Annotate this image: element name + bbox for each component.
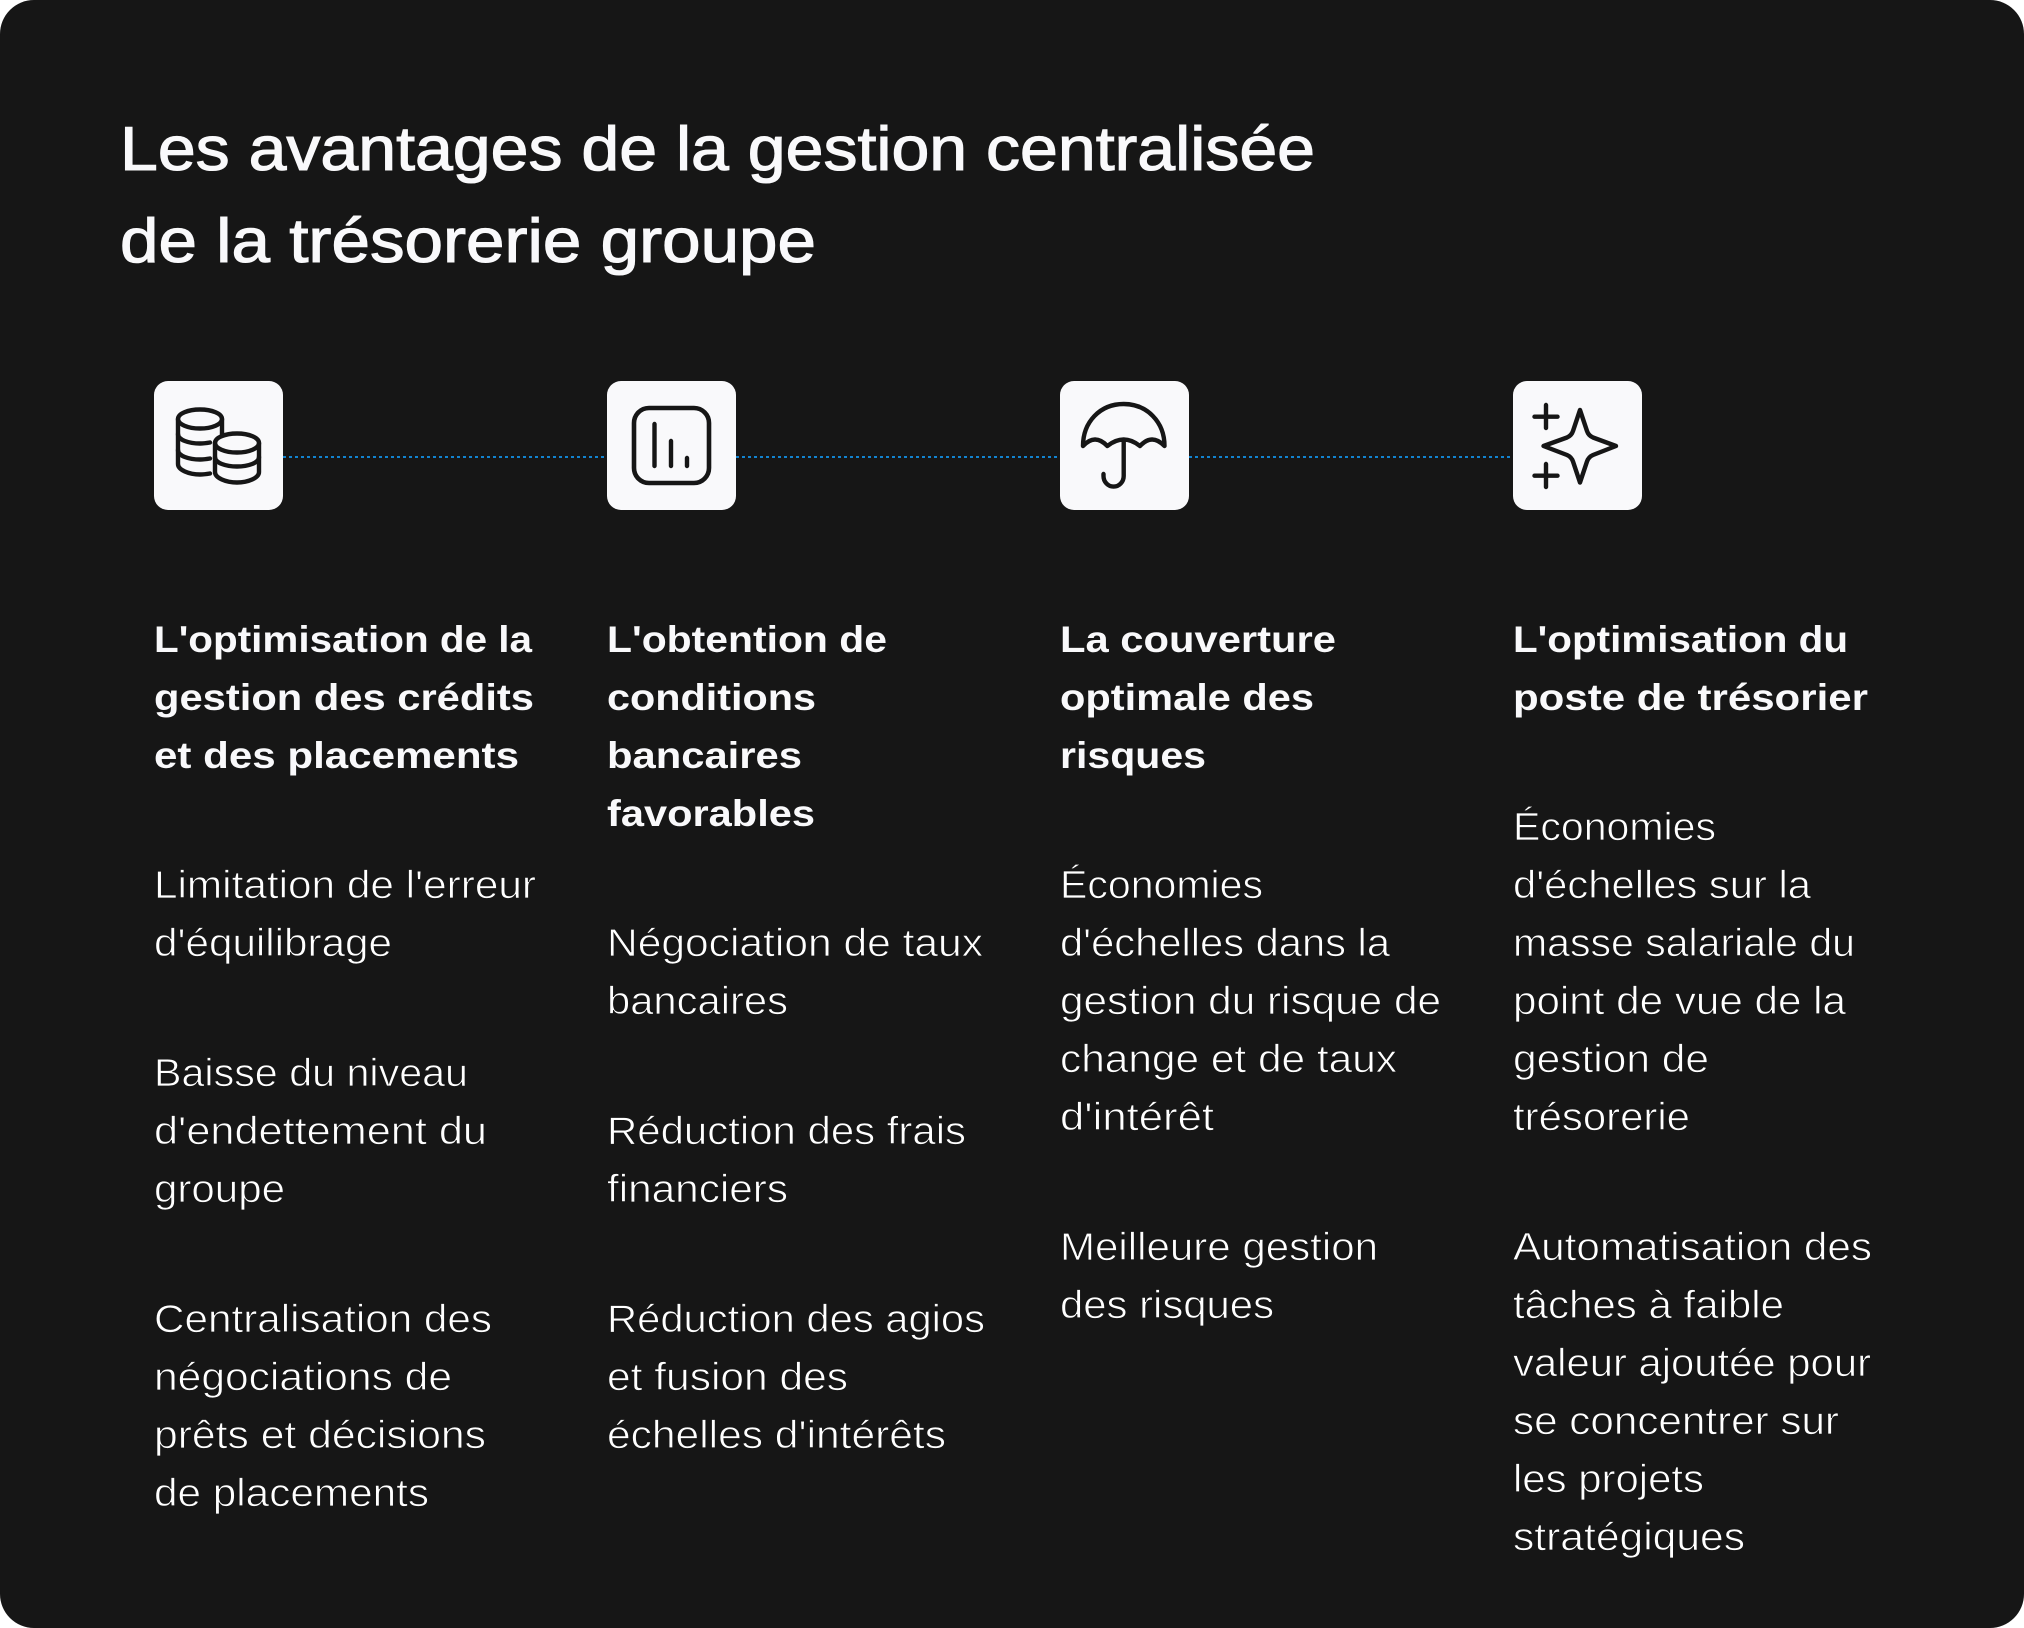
text: limitation [154,864,536,965]
connector: dotted line 1 [283,456,607,458]
title [120,115,1315,276]
heading: column 2 [607,619,887,834]
text: automatisation: se concentrer sur [1513,1400,1839,1443]
title: Les avantages de la gestion centralisée [120,115,1315,184]
text: limitation: Limitation de l'erreur [154,864,536,907]
heading: column 3: La couverture [1060,619,1336,660]
text: économies: gestion du risque de [1060,980,1441,1023]
text: meilleure gestion [1060,1226,1378,1327]
heading: column 1 [154,619,534,776]
heading: column 2: L'obtention de [607,619,887,660]
heading: column 1: gestion des crédits [154,677,534,718]
text: négociation: Négociation de taux [607,922,984,965]
text: automatisation: stratégiques [1513,1516,1745,1559]
text: automatisation: Automatisation des [1513,1226,1872,1269]
column 1 [154,619,536,1515]
text: automatisation: valeur ajoutée pour [1513,1342,1871,1385]
text: baisse: Baisse du niveau [154,1052,468,1095]
text: centralisation: de placements [154,1472,429,1515]
column 3 [1060,619,1441,1327]
text: réduction frais: financiers [607,1168,788,1211]
text: baisse [154,1052,487,1211]
heading: column 3: optimale des [1060,677,1314,718]
text: économies salariale: d'échelles sur la [1513,864,1811,907]
text: réduction agios: et fusion des [607,1356,848,1399]
text: réduction agios: échelles d'intérêts [607,1414,946,1457]
text: économies salariale: point de vue de la [1513,980,1846,1023]
text: économies salariale: masse salariale du [1513,922,1855,965]
text: réduction agios [607,1298,985,1457]
heading: column 2: conditions [607,677,816,718]
column 2 [607,619,985,1457]
text: économies salariale: Économies [1513,806,1716,849]
text: limitation: d'équilibrage [154,922,392,965]
title: de la trésorerie groupe [120,207,816,276]
text: économies: d'intérêt [1060,1096,1214,1139]
icon: coin stacks [154,381,283,510]
text: meilleure gestion: Meilleure gestion [1060,1226,1378,1269]
heading: column 4 [1513,619,1868,718]
text: réduction frais [607,1110,966,1211]
text: baisse: d'endettement du [154,1110,487,1153]
text: économies: change et de taux [1060,1038,1398,1081]
text: meilleure gestion: des risques [1060,1284,1274,1327]
text: centralisation: Centralisation des [154,1298,492,1341]
text: automatisation: les projets [1513,1458,1704,1501]
heading: column 4: L'optimisation du [1513,619,1848,660]
text: réduction agios: Réduction des agios [607,1298,985,1341]
text: automatisation: tâches à faible [1513,1284,1784,1327]
heading: column 4: poste de trésorier [1513,677,1868,718]
icon: sparkle [1513,381,1642,510]
icon: umbrella [1060,381,1189,510]
text: économies: d'échelles dans la [1060,922,1390,965]
text: économies salariale [1513,806,1855,1139]
connector: dotted line 2 [736,456,1060,458]
heading: column 3 [1060,619,1336,776]
text: centralisation: négociations de [154,1356,452,1399]
text: automatisation [1513,1226,1872,1559]
text: centralisation [154,1298,492,1515]
text: négociation [607,922,984,1023]
heading: column 1: L'optimisation de la [154,619,532,660]
icon: bar chart [607,381,736,510]
text: réduction frais: Réduction des frais [607,1110,966,1153]
text: centralisation: prêts et décisions [154,1414,486,1457]
text: négociation: bancaires [607,980,788,1023]
text: économies salariale: gestion de [1513,1038,1709,1081]
heading: column 2: bancaires [607,735,802,776]
heading: column 1: et des placements [154,735,519,776]
connector: dotted line 3 [1189,456,1513,458]
column 4 [1513,619,1872,1559]
heading: column 2: favorables [607,793,815,834]
text: économies: Économies [1060,864,1263,907]
text: économies salariale: trésorerie [1513,1096,1690,1139]
text: économies [1060,864,1441,1139]
heading: column 3: risques [1060,735,1206,776]
text: baisse: groupe [154,1168,285,1211]
